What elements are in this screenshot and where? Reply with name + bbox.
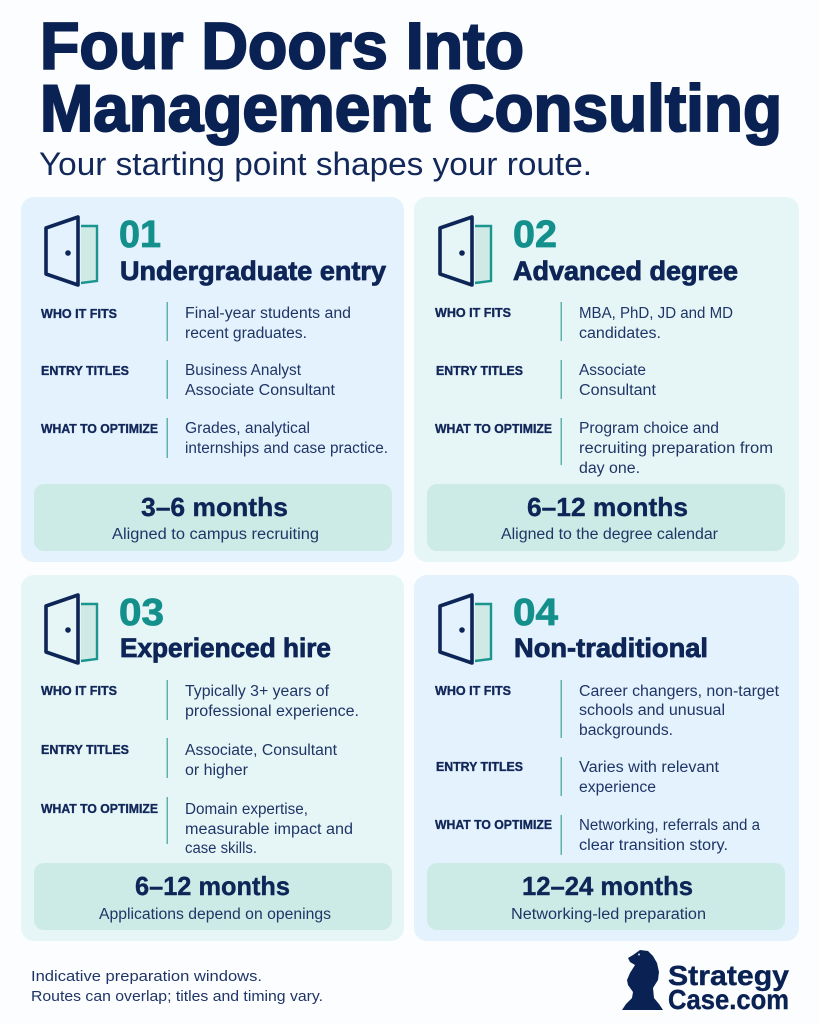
row: entry titles: ENTRY TITLES — [436, 364, 523, 378]
timing callout: 3–6 months — [141, 492, 288, 522]
wordmark — [668, 960, 789, 1015]
row: who it fits: Career changers, non-target — [579, 683, 780, 700]
row: entry titles: ENTRY TITLES — [41, 743, 129, 757]
row: who it fits: backgrounds. — [579, 722, 673, 739]
row: what to optimize: clear transition story. — [579, 837, 728, 854]
row: what to optimize: WHAT TO OPTIMIZE — [41, 422, 158, 436]
icon: door 04 — [440, 595, 491, 663]
row: what to optimize: day one. — [579, 460, 640, 477]
row: who it fits: professional experience. — [185, 703, 359, 720]
row: what to optimize: recruiting preparation from — [579, 440, 773, 457]
timing callout — [34, 484, 392, 551]
row: what to optimize: WHAT TO OPTIMIZE — [435, 818, 552, 832]
icon: door 02 — [440, 217, 491, 285]
timing callout: 12–24 months — [522, 871, 693, 901]
timing callout: Networking-led preparation — [511, 906, 706, 923]
row: who it fits: MBA, PhD, JD and MD — [579, 305, 733, 322]
row: who it fits: recent graduates. — [185, 325, 307, 342]
row: entry titles: Associate, Consultant — [185, 742, 338, 759]
timing callout: Applications depend on openings — [99, 906, 331, 923]
row: entry titles — [436, 360, 657, 399]
row: entry titles: Varies with relevant — [579, 759, 720, 776]
footnote — [31, 968, 323, 1005]
row: entry titles: Business Analyst — [185, 362, 302, 379]
row: entry titles: Consultant — [579, 382, 657, 399]
row: who it fits: Typically 3+ years of — [185, 683, 330, 700]
panel: 04 non-traditional — [414, 575, 799, 941]
timing callout — [427, 863, 785, 930]
title: Four Doors Into — [40, 8, 524, 82]
row: entry titles: experience — [579, 779, 656, 796]
row: entry titles: Associate — [579, 362, 646, 379]
logo: StrategyCase.com — [622, 950, 789, 1015]
icon: door 01 — [46, 217, 97, 285]
row: who it fits — [41, 680, 359, 720]
icon: door 03 — [46, 595, 97, 663]
timing callout — [34, 863, 392, 930]
row: entry titles: or higher — [185, 762, 248, 779]
row: what to optimize: Domain expertise, — [185, 801, 308, 818]
row: who it fits — [435, 302, 733, 342]
row: who it fits: WHO IT FITS — [435, 306, 511, 320]
timing callout: 6–12 months — [135, 871, 290, 901]
row: what to optimize — [41, 418, 388, 458]
row: what to optimize — [435, 815, 760, 855]
title: Management Consulting — [40, 71, 782, 145]
row: entry titles — [436, 757, 720, 796]
row: who it fits: WHO IT FITS — [435, 684, 511, 698]
timing callout: Aligned to campus recruiting — [112, 526, 319, 543]
row: what to optimize: WHAT TO OPTIMIZE — [435, 422, 552, 436]
row: entry titles — [41, 360, 336, 399]
row: entry titles: ENTRY TITLES — [436, 760, 523, 774]
row: what to optimize: Networking, referrals and a — [579, 817, 760, 834]
panel: 03 experienced hire — [21, 575, 404, 941]
panel: 02 advanced degree — [414, 197, 799, 562]
row: who it fits: WHO IT FITS — [41, 307, 117, 321]
number 03: 03 — [119, 592, 164, 634]
subtitle: Your starting point shapes your route. — [39, 146, 592, 182]
heading: Advanced degree — [513, 256, 738, 286]
heading: Undergraduate entry — [120, 256, 386, 286]
number 01: 01 — [119, 214, 161, 256]
row: what to optimize: case skills. — [185, 840, 257, 857]
number 04: 04 — [513, 592, 558, 634]
wordmark: Strategy — [668, 960, 789, 991]
timing callout: 6–12 months — [527, 492, 688, 522]
panel: 01 undergraduate entry — [21, 197, 404, 562]
row: who it fits: WHO IT FITS — [41, 684, 117, 698]
row: what to optimize: Program choice and — [579, 420, 719, 437]
row: who it fits: Final-year students and — [185, 305, 351, 322]
row: who it fits — [41, 302, 351, 342]
row: who it fits: candidates. — [579, 325, 661, 342]
footnote: Indicative preparation windows. — [31, 968, 262, 985]
row: what to optimize — [41, 797, 353, 857]
row: entry titles: ENTRY TITLES — [41, 364, 129, 378]
row: what to optimize: WHAT TO OPTIMIZE — [41, 802, 158, 816]
row: who it fits — [435, 680, 780, 739]
heading: Experienced hire — [120, 633, 331, 663]
row: what to optimize: measurable impact and — [185, 821, 353, 838]
title — [40, 8, 782, 145]
heading: Non-traditional — [514, 633, 708, 663]
row: who it fits: schools and unusual — [579, 702, 725, 719]
row: entry titles — [41, 738, 338, 779]
footnote: Routes can overlap; titles and timing vary. — [31, 988, 323, 1005]
row: what to optimize: internships and case practice. — [185, 440, 388, 457]
timing callout: Aligned to the degree calendar — [501, 526, 718, 543]
row: entry titles: Associate Consultant — [185, 382, 336, 399]
icon: chess knight — [622, 950, 663, 1010]
timing callout — [427, 484, 785, 551]
number 02: 02 — [513, 214, 557, 256]
row: what to optimize: Grades, analytical — [185, 420, 310, 437]
row: what to optimize — [435, 418, 773, 477]
wordmark: Case.com — [668, 984, 789, 1015]
